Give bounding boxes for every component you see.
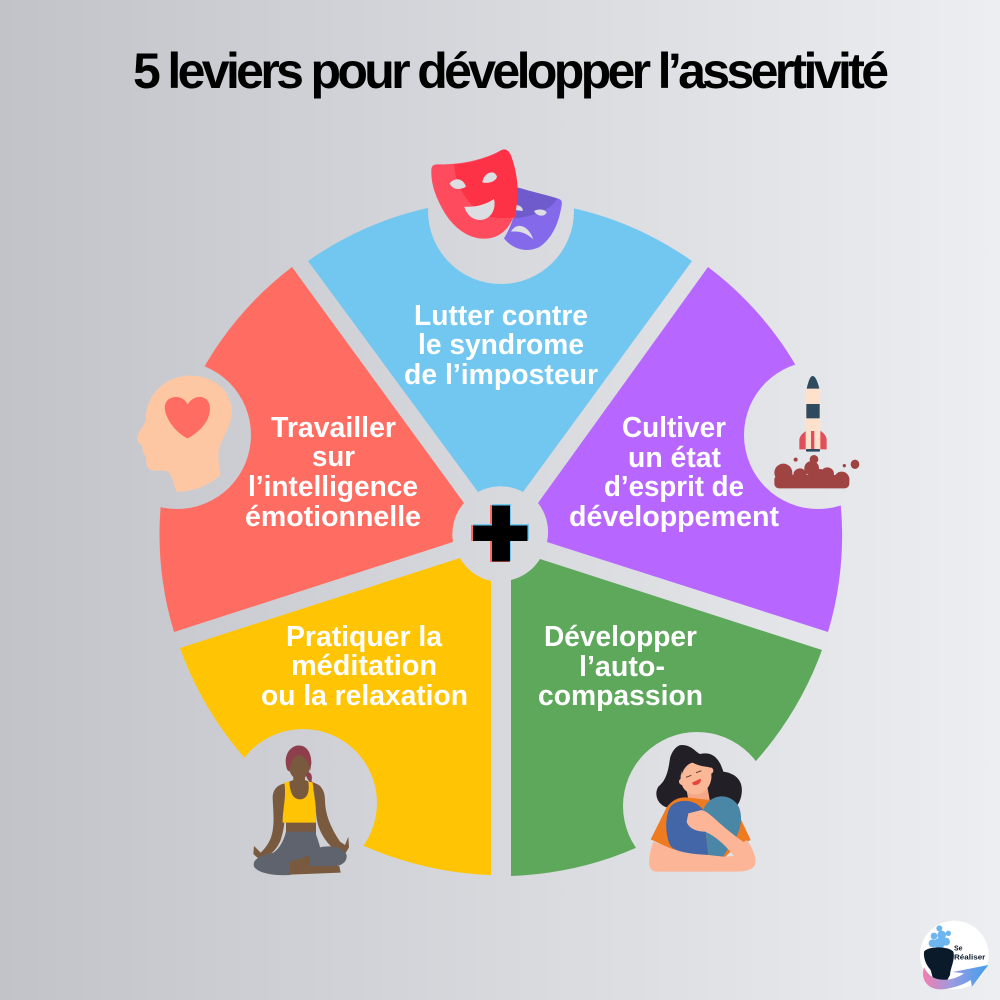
text: Travailler sur l'intelligence émotionnelle: l’intelligence [248,471,418,503]
wheel of five segments [160,200,842,876]
text: Travailler sur l'intelligence émotionnelle [245,412,421,533]
text: Pratiquer la méditation ou la relaxation: méditation [291,650,437,682]
text: Cultiver un état d'esprit de développement: un état [628,442,721,474]
text: Lutter contre le syndrome de l'imposteur: le syndrome [418,329,584,361]
title: 5 leviers pour développer l’assertivité [133,43,889,99]
logo: Se Réaliser [920,921,989,989]
text: Pratiquer la méditation ou la relaxation: ou la relaxation [261,680,468,712]
text: Travailler sur l'intelligence émotionnelle: sur [312,441,355,473]
segment: blue [308,200,692,492]
text: Lutter contre le syndrome de l'imposteur: de l’imposteur [404,359,598,391]
text: Cultiver un état d'esprit de développement [569,412,779,533]
text: Cultiver un état d'esprit de développement: développement [569,501,779,533]
segment: red [160,267,464,632]
icon: head with heart [137,376,232,492]
logo arrow [923,965,988,989]
text: Développer l'auto-compassion: l’auto- [579,651,665,683]
icon: theatre masks [431,149,562,250]
icon: woman hugging heart [649,745,755,872]
logo splash [929,925,951,949]
text: Cultiver un état d'esprit de développement: Cultiver [622,412,726,444]
segment: yellow [180,558,491,875]
logo head [924,947,954,980]
text: Travailler sur l'intelligence émotionnelle: émotionnelle [245,501,421,533]
icon: plus sign [471,504,529,562]
icon: rocket [774,376,859,488]
segment: green [511,559,822,876]
text: Cultiver un état d'esprit de développement: d’esprit de [604,471,744,503]
icon: meditating woman [253,745,349,875]
text: Développer l'auto-compassion [538,621,703,712]
text: Développer l'auto-compassion: Développer [544,621,697,653]
text: Développer l'auto-compassion: compassion [538,680,703,712]
text: Lutter contre le syndrome de l'imposteur [404,300,598,391]
text: Pratiquer la méditation ou la relaxation [261,621,468,712]
logo text second line: Réaliser [954,955,986,962]
text: Pratiquer la méditation ou la relaxation: Pratiquer la [286,621,443,653]
text: Travailler sur l'intelligence émotionnelle: Travailler [271,412,396,444]
logo text: Se [954,946,963,953]
text: Lutter contre le syndrome de l'imposteur: Lutter contre [414,300,588,332]
segment: purple [538,267,842,632]
logo white disc [920,921,989,989]
